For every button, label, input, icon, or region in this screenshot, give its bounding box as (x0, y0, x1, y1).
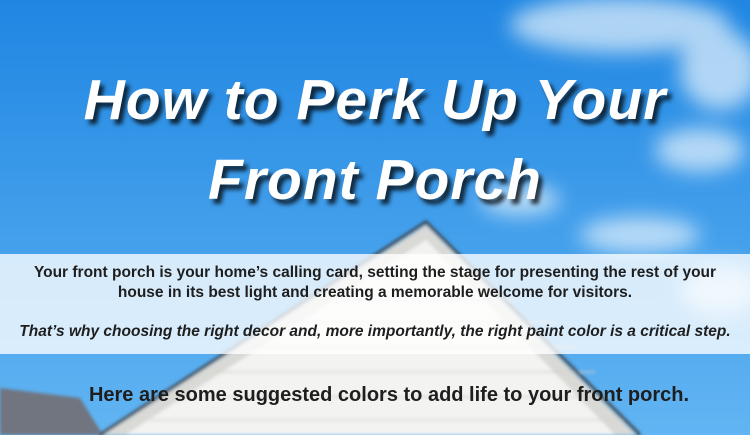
intro band (0, 254, 750, 354)
suggestion text: Here are some suggested colors to add life to your front porch. (89, 384, 689, 406)
title (84, 68, 675, 212)
title: How to Perk Up Your (84, 68, 666, 132)
title: Front Porch (208, 148, 542, 212)
intro text: house in its best light and creating a memorable welcome for visitors. (118, 284, 632, 301)
intro text (34, 264, 716, 301)
intro text: Your front porch is your home’s calling card, setting the stage for presenting the rest of your (34, 264, 716, 281)
italic statement: That’s why choosing the right decor and, more importantly, the right paint color is a critical step. (19, 323, 731, 340)
